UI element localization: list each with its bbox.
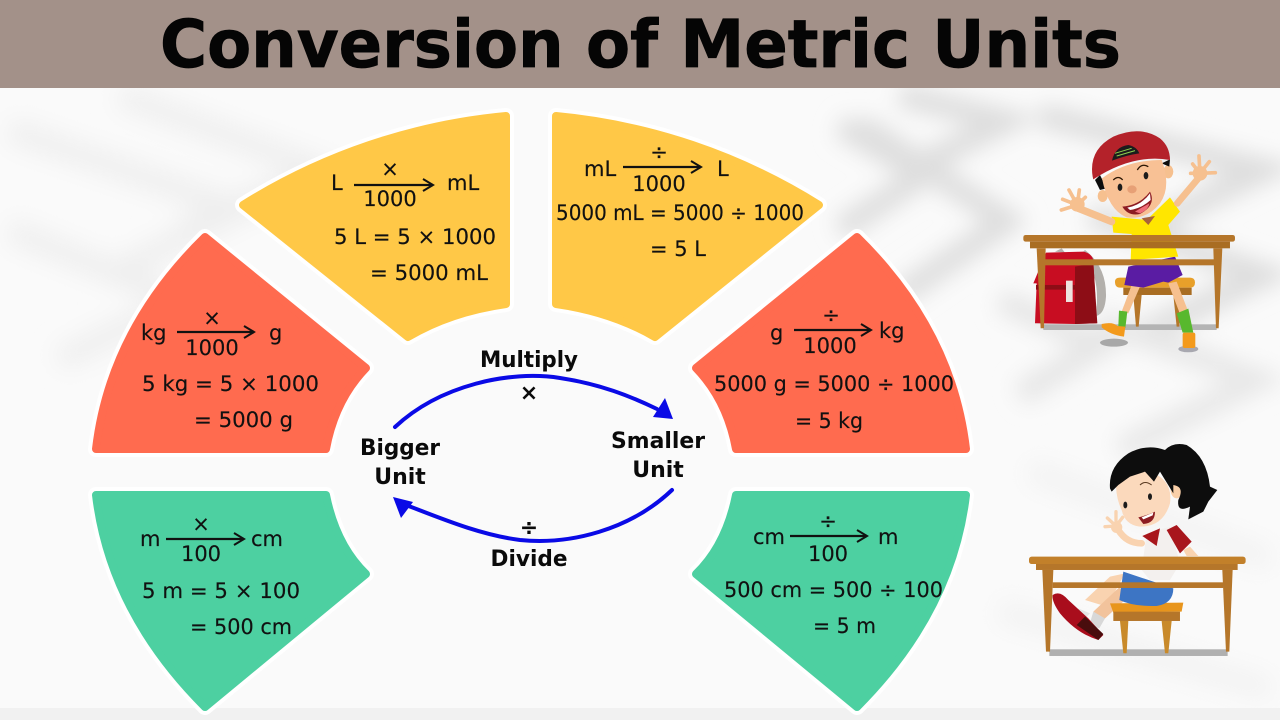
panel: grams to kilograms: kg <box>879 319 904 343</box>
panel: litres to millilitres: = 5000 mL <box>370 261 488 285</box>
panel: millilitres to litres: = 5 L <box>650 237 706 261</box>
center diagram <box>360 348 705 572</box>
panel: kilograms to grams: × <box>203 306 221 330</box>
panel: grams to kilograms: ÷ <box>822 303 840 327</box>
panel: centimetres to metres: 100 <box>808 542 848 566</box>
label: times sign: × <box>520 381 538 406</box>
panel: millilitres to litres: 1000 <box>632 172 686 196</box>
title bar <box>0 0 1280 88</box>
label: divide sign: ÷ <box>520 516 538 541</box>
panel: kilograms to grams: kg <box>141 321 166 345</box>
panel: kilograms to grams: 5 kg = 5 × 1000 <box>142 372 319 396</box>
panel: centimetres to metres: cm <box>753 525 785 549</box>
panel: millilitres to litres: ÷ <box>650 140 668 164</box>
panel: metres to centimetres: cm <box>251 527 283 551</box>
panel: kilograms to grams: 1000 <box>185 336 239 360</box>
panel: millilitres to litres: L <box>717 157 729 181</box>
title: Conversion of Metric Units <box>160 6 1121 83</box>
panel: metres to centimetres: m <box>140 527 160 551</box>
panel: litres to millilitres: 1000 <box>363 187 417 211</box>
label: bigger unit <box>360 436 440 490</box>
arrow: multiply <box>395 376 673 427</box>
panel: metres to centimetres: 100 <box>181 542 221 566</box>
panel: millilitres to litres: 5000 mL = 5000 ÷ 1000 <box>556 201 804 225</box>
panel: metres to centimetres <box>96 495 366 707</box>
panel: kilograms to grams: = 5000 g <box>194 408 293 432</box>
illustration: boy at desk <box>1023 131 1235 352</box>
arrow: divide <box>393 490 672 541</box>
label: smaller unit <box>611 429 705 483</box>
label: bigger unit: Bigger <box>360 436 440 461</box>
panel: metres to centimetres: × <box>192 512 210 536</box>
label: smaller unit: Unit <box>632 458 684 483</box>
panel: centimetres to metres: ÷ <box>819 509 837 533</box>
panel: millilitres to litres: mL <box>584 157 616 181</box>
panel: kilograms to grams <box>96 237 366 449</box>
panel: litres to millilitres: × <box>381 157 399 181</box>
panel: millilitres to litres <box>556 116 819 337</box>
panel: litres to millilitres: mL <box>447 171 479 195</box>
panel: centimetres to metres: = 5 m <box>813 614 876 638</box>
panel: kilograms to grams: g <box>269 321 282 345</box>
panel: grams to kilograms: g <box>770 321 783 345</box>
panel: centimetres to metres <box>696 495 966 707</box>
panel: centimetres to metres: 500 cm = 500 ÷ 100 <box>724 578 943 602</box>
panel: grams to kilograms <box>696 237 966 449</box>
panel: metres to centimetres: 5 m = 5 × 100 <box>142 579 300 603</box>
label: bigger unit: Unit <box>374 465 426 490</box>
panel: litres to millilitres: L <box>331 171 343 195</box>
panel: centimetres to metres: m <box>878 525 898 549</box>
label: smaller unit: Smaller <box>611 429 705 454</box>
label: multiply: Multiply <box>480 348 578 373</box>
panel: grams to kilograms: 5000 g = 5000 ÷ 1000 <box>714 372 954 396</box>
panel: metres to centimetres: = 500 cm <box>190 615 292 639</box>
illustration: girl at desk <box>1029 444 1246 656</box>
panel: litres to millilitres <box>243 116 506 337</box>
panel: grams to kilograms: 1000 <box>803 334 857 358</box>
panel: litres to millilitres: 5 L = 5 × 1000 <box>334 225 496 249</box>
label: divide: Divide <box>490 547 568 572</box>
panel: grams to kilograms: = 5 kg <box>795 409 863 433</box>
